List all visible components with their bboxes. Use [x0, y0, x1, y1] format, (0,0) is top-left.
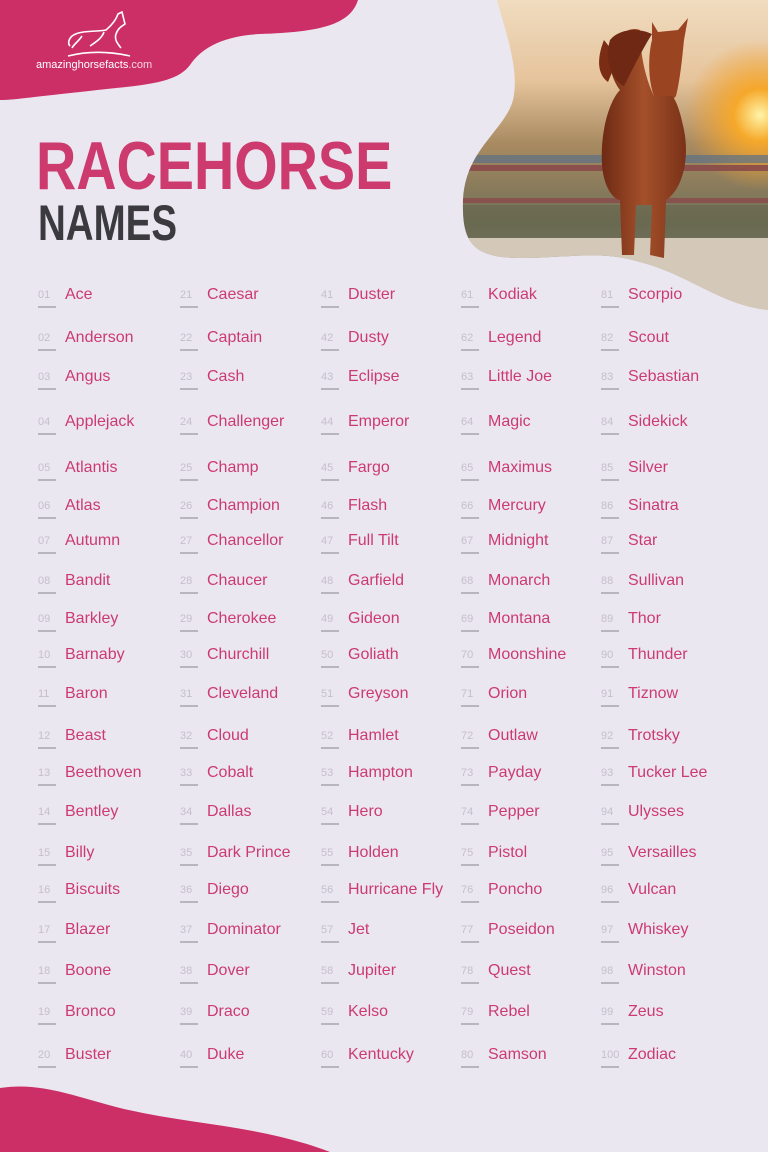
column 5: 85 — [601, 462, 613, 474]
column 5: 91 — [601, 688, 613, 700]
column 1: 05 — [38, 462, 50, 474]
column 4: 79 — [461, 1006, 473, 1018]
column 3: Holden — [348, 844, 399, 861]
column 2: Dallas — [207, 803, 251, 820]
column 4: Payday — [488, 764, 541, 781]
column 1: 08 — [38, 575, 50, 587]
column 2: Cobalt — [207, 764, 253, 781]
column 4: 80 — [461, 1049, 473, 1061]
column 5: Sebastian — [628, 368, 699, 385]
column 3: 49 — [321, 613, 333, 625]
photo: horse at sunset — [462, 0, 768, 310]
column 5: Whiskey — [628, 921, 688, 938]
column 1: Boone — [65, 962, 111, 979]
column 5: 93 — [601, 767, 613, 779]
column 1: Biscuits — [65, 881, 120, 898]
column 3: 45 — [321, 462, 333, 474]
column 2: 38 — [180, 965, 192, 977]
column 1: Beethoven — [65, 764, 142, 781]
column 2: 35 — [180, 847, 192, 859]
column 5: Tucker Lee — [628, 764, 707, 781]
column 3: 47 — [321, 535, 333, 547]
column 1: Bronco — [65, 1003, 116, 1020]
column 3: 48 — [321, 575, 333, 587]
column 1: 07 — [38, 535, 50, 547]
column 3 — [321, 286, 444, 1068]
column 3: 41 — [321, 289, 333, 301]
column 5: Sinatra — [628, 497, 679, 514]
column 1: Beast — [65, 727, 106, 744]
column 4: Orion — [488, 685, 527, 702]
column 4: 67 — [461, 535, 473, 547]
column 3: Gideon — [348, 610, 400, 627]
column 4: 76 — [461, 884, 473, 896]
column 2: 26 — [180, 500, 192, 512]
column 3: Greyson — [348, 685, 408, 702]
column 2: 23 — [180, 371, 192, 383]
column 4: 71 — [461, 688, 473, 700]
column 4: Moonshine — [488, 646, 566, 663]
column 2: 31 — [180, 688, 192, 700]
column 2: Cash — [207, 368, 244, 385]
column 1: 19 — [38, 1006, 50, 1018]
title: RACEHORSE — [36, 128, 392, 204]
column 2: Challenger — [207, 413, 284, 430]
column 4: 74 — [461, 806, 473, 818]
column 1: Bandit — [65, 572, 110, 589]
column 3: Jupiter — [348, 962, 396, 979]
column 3: Hampton — [348, 764, 413, 781]
column 4: Maximus — [488, 459, 552, 476]
column 3: 52 — [321, 730, 333, 742]
column 3: Jet — [348, 921, 369, 938]
column 4: Mercury — [488, 497, 546, 514]
column 5: 82 — [601, 332, 613, 344]
column 1: Atlas — [65, 497, 101, 514]
column 5: Winston — [628, 962, 686, 979]
column 1: 13 — [38, 767, 50, 779]
column 3: Hero — [348, 803, 383, 820]
column 4: Samson — [488, 1046, 547, 1063]
column 1: Buster — [65, 1046, 111, 1063]
column 4: 73 — [461, 767, 473, 779]
column 5: Sidekick — [628, 413, 688, 430]
column 2: 30 — [180, 649, 192, 661]
column 1: 16 — [38, 884, 50, 896]
column 5: 86 — [601, 500, 613, 512]
column 3: Emperor — [348, 413, 409, 430]
column 5: Silver — [628, 459, 668, 476]
column 3: 44 — [321, 416, 333, 428]
column 5: Sullivan — [628, 572, 684, 589]
column 4: Montana — [488, 610, 550, 627]
column 2: 32 — [180, 730, 192, 742]
column 5: Thunder — [628, 646, 688, 663]
column 4: 75 — [461, 847, 473, 859]
names list — [38, 286, 707, 1068]
logo — [36, 11, 152, 71]
column 4: Quest — [488, 962, 531, 979]
column 4: 69 — [461, 613, 473, 625]
column 2: Champ — [207, 459, 259, 476]
column 2: Dover — [207, 962, 250, 979]
horse — [599, 18, 688, 258]
column 5: Star — [628, 532, 657, 549]
column 1: Autumn — [65, 532, 120, 549]
column 1: 06 — [38, 500, 50, 512]
column 4: Magic — [488, 413, 531, 430]
column 3: 60 — [321, 1049, 333, 1061]
column 1: 02 — [38, 332, 50, 344]
column 1: 14 — [38, 806, 50, 818]
column 5: 89 — [601, 613, 613, 625]
column 2: 24 — [180, 416, 192, 428]
column 1: Baron — [65, 685, 108, 702]
column 5: 83 — [601, 371, 613, 383]
column 4: 70 — [461, 649, 473, 661]
column 3: 59 — [321, 1006, 333, 1018]
column 2: Captain — [207, 329, 262, 346]
column 4: Rebel — [488, 1003, 530, 1020]
column 2 — [180, 286, 291, 1068]
column 2: Draco — [207, 1003, 250, 1020]
column 5: Zeus — [628, 1003, 664, 1020]
column 5: 100 — [601, 1049, 619, 1061]
column 1: Blazer — [65, 921, 110, 938]
column 3: Dusty — [348, 329, 389, 346]
column 2: 27 — [180, 535, 192, 547]
column 2: 33 — [180, 767, 192, 779]
logo text: amazinghorsefacts.com — [36, 59, 152, 71]
column 1 — [38, 286, 142, 1068]
column 5: 88 — [601, 575, 613, 587]
column 5: Ulysses — [628, 803, 684, 820]
column 2: Diego — [207, 881, 249, 898]
column 1: 04 — [38, 416, 50, 428]
column 1: Barnaby — [65, 646, 125, 663]
column 3: Kentucky — [348, 1046, 414, 1063]
column 2: Dark Prince — [207, 844, 291, 861]
column 1: 10 — [38, 649, 50, 661]
column 3: 56 — [321, 884, 333, 896]
column 4: 64 — [461, 416, 473, 428]
column 2: 25 — [180, 462, 192, 474]
column 5: 96 — [601, 884, 613, 896]
column 5: Scorpio — [628, 286, 682, 303]
column 2: 21 — [180, 289, 192, 301]
column 3: 51 — [321, 688, 333, 700]
column 1: Barkley — [65, 610, 118, 627]
column 4: 68 — [461, 575, 473, 587]
column 2: 36 — [180, 884, 192, 896]
column 2: 40 — [180, 1049, 192, 1061]
column 2: Cleveland — [207, 685, 278, 702]
column 3: 57 — [321, 924, 333, 936]
column 4: Outlaw — [488, 727, 538, 744]
column 4: 65 — [461, 462, 473, 474]
column 2: 34 — [180, 806, 192, 818]
column 1: Billy — [65, 844, 94, 861]
column 2: 39 — [180, 1006, 192, 1018]
column 2: Chaucer — [207, 572, 267, 589]
column 1: 09 — [38, 613, 50, 625]
column 3: 42 — [321, 332, 333, 344]
column 2: Duke — [207, 1046, 244, 1063]
column 1: Angus — [65, 368, 110, 385]
icon: horse — [68, 11, 130, 57]
column 4 — [461, 286, 566, 1068]
column 2: 28 — [180, 575, 192, 587]
column 1: Atlantis — [65, 459, 117, 476]
column 4: Legend — [488, 329, 541, 346]
column 5: Thor — [628, 610, 661, 627]
column 5: 98 — [601, 965, 613, 977]
column 5: 92 — [601, 730, 613, 742]
column 3: Kelso — [348, 1003, 388, 1020]
column 1: Anderson — [65, 329, 134, 346]
column 1: 03 — [38, 371, 50, 383]
column 4: 66 — [461, 500, 473, 512]
column 4: Pistol — [488, 844, 527, 861]
column 1: Applejack — [65, 413, 134, 430]
column 5: 81 — [601, 289, 613, 301]
column 1: 15 — [38, 847, 50, 859]
column 5: Tiznow — [628, 685, 678, 702]
column 3: 46 — [321, 500, 333, 512]
column 2: Dominator — [207, 921, 281, 938]
column 3: 43 — [321, 371, 333, 383]
column 5: Trotsky — [628, 727, 680, 744]
column 2: Cherokee — [207, 610, 276, 627]
column 4: 72 — [461, 730, 473, 742]
column 3: 55 — [321, 847, 333, 859]
column 1: 12 — [38, 730, 50, 742]
column 3: Duster — [348, 286, 395, 303]
column 3: 53 — [321, 767, 333, 779]
column 5: Vulcan — [628, 881, 676, 898]
column 5 — [601, 286, 707, 1068]
column 5: 94 — [601, 806, 613, 818]
column 1: Ace — [65, 286, 93, 303]
column 4: Midnight — [488, 532, 548, 549]
column 5: 97 — [601, 924, 613, 936]
column 4: 77 — [461, 924, 473, 936]
column 3: Full Tilt — [348, 532, 399, 549]
column 5: Versailles — [628, 844, 696, 861]
column 3: Eclipse — [348, 368, 400, 385]
column 5: 87 — [601, 535, 613, 547]
column 5: 99 — [601, 1006, 613, 1018]
column 3: Hurricane Fly — [348, 881, 443, 898]
column 5: Zodiac — [628, 1046, 676, 1063]
column 5: 90 — [601, 649, 613, 661]
column 4: Poseidon — [488, 921, 555, 938]
column 4: Kodiak — [488, 286, 537, 303]
column 3: Flash — [348, 497, 387, 514]
column 4: Pepper — [488, 803, 540, 820]
column 1: 18 — [38, 965, 50, 977]
column 2: Cloud — [207, 727, 249, 744]
column 3: 58 — [321, 965, 333, 977]
column 4: 61 — [461, 289, 473, 301]
column 4: 63 — [461, 371, 473, 383]
column 3: Goliath — [348, 646, 399, 663]
column 2: 29 — [180, 613, 192, 625]
column 2: Champion — [207, 497, 280, 514]
column 1: 01 — [38, 289, 50, 301]
column 4: Monarch — [488, 572, 550, 589]
column 2: Churchill — [207, 646, 269, 663]
column 1: 11 — [38, 688, 49, 700]
column 1: Bentley — [65, 803, 118, 820]
column 5: Scout — [628, 329, 669, 346]
column 3: Fargo — [348, 459, 390, 476]
column 4: Little Joe — [488, 368, 552, 385]
column 1: 17 — [38, 924, 50, 936]
column 3: Hamlet — [348, 727, 399, 744]
column 3: Garfield — [348, 572, 404, 589]
column 2: 22 — [180, 332, 192, 344]
column 1: 20 — [38, 1049, 50, 1061]
subtitle: NAMES — [38, 195, 177, 251]
column 4: 78 — [461, 965, 473, 977]
column 2: 37 — [180, 924, 192, 936]
column 3: 54 — [321, 806, 333, 818]
column 2: Caesar — [207, 286, 259, 303]
column 2: Chancellor — [207, 532, 283, 549]
column 4: Poncho — [488, 881, 542, 898]
column 4: 62 — [461, 332, 473, 344]
column 3: 50 — [321, 649, 333, 661]
column 5: 84 — [601, 416, 613, 428]
column 5: 95 — [601, 847, 613, 859]
